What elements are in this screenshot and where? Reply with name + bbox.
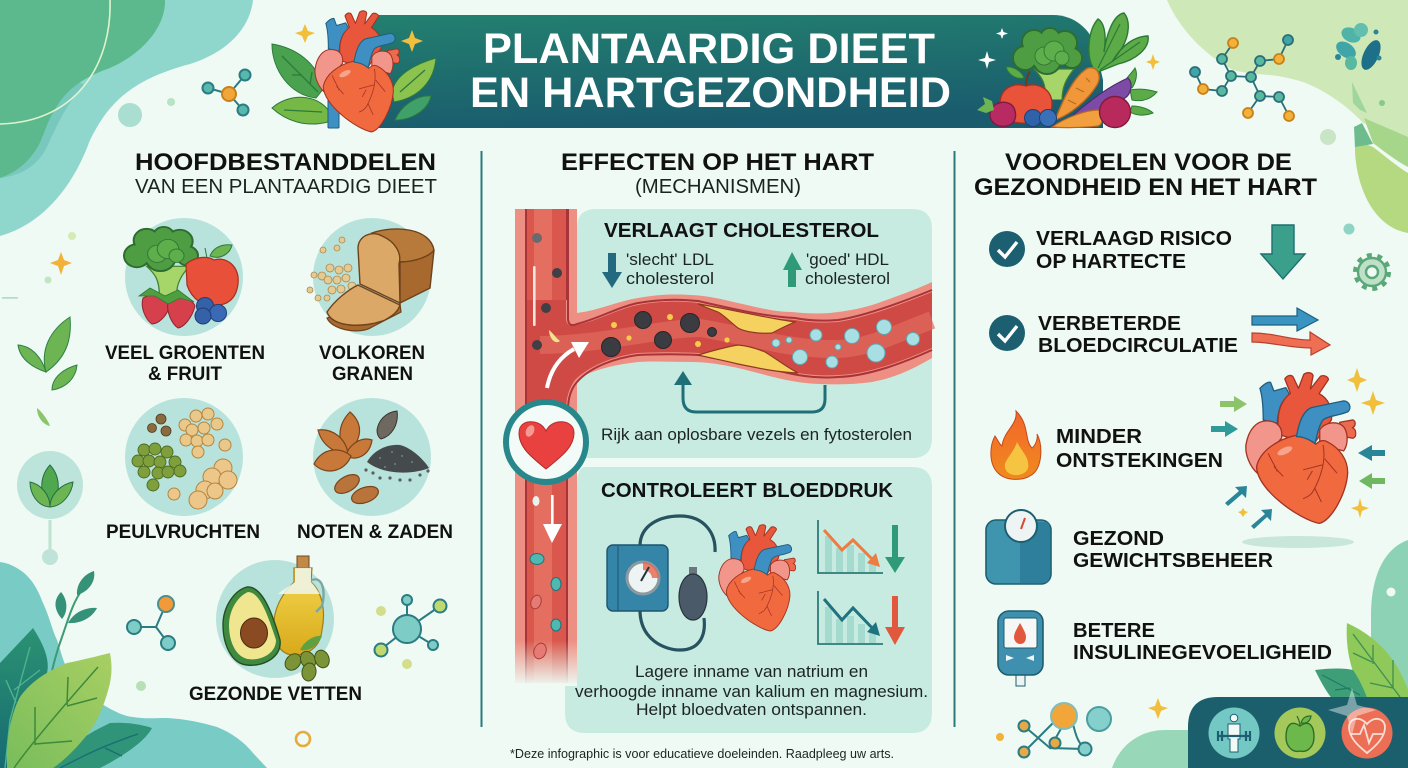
title: PLANTAARDIG DIEET — [483, 26, 935, 73]
benefit: healthy weight — [986, 510, 1274, 584]
sparkle bottom — [1148, 698, 1168, 719]
heading: components: HOOFDBESTANDDELEN — [135, 149, 436, 176]
icon: check — [989, 231, 1025, 267]
sprig — [50, 571, 97, 680]
plaque bottom — [698, 345, 798, 373]
title — [470, 26, 951, 117]
title: EN HARTGEZONDHEID — [470, 70, 951, 117]
label — [319, 343, 425, 385]
icon: scale — [986, 510, 1051, 584]
heading: blood pressure: CONTROLEERT BLOEDDRUK — [601, 480, 894, 502]
cholesterol heading and legend — [602, 220, 890, 288]
benefit: better circulation: VERBETERDE — [1038, 313, 1181, 335]
icon: heart in circle — [506, 402, 586, 482]
arrow: flow into branch — [547, 349, 574, 388]
label: GEZONDE VETTEN — [189, 684, 362, 705]
heading: benefits: VOORDELEN VOOR DE — [1005, 149, 1292, 176]
item: whole grains — [307, 218, 434, 385]
cholesterol heading and legend: 'goed' HDL — [806, 251, 889, 269]
text: sodium and potassium: verhoogde inname van kalium en magnesium. — [575, 683, 928, 701]
cholesterol heading and legend: cholesterol — [805, 270, 890, 288]
icon: heart rate — [1328, 688, 1392, 758]
icon: leaf medallion on left — [17, 451, 83, 565]
heading: components: VAN EEN PLANTAARDIG DIEET — [135, 176, 437, 198]
footnote: *Deze infographic is voor educatieve doeleinden. Raadpleeg uw arts. — [510, 747, 894, 761]
item: healthy fats — [189, 556, 362, 705]
heading: components — [135, 149, 437, 198]
text: sodium and potassium: Lagere inname van natrium en — [635, 663, 868, 681]
decorative blob: bottom left with leaves — [0, 562, 267, 768]
decorative dots — [136, 681, 310, 746]
label: VEEL GROENTEN — [105, 343, 265, 364]
icon: big heart with arrows — [1211, 368, 1385, 548]
item: vegetables and fruit — [105, 218, 265, 385]
title banner — [372, 15, 1103, 128]
arrow: bracket from fibres to artery — [674, 371, 825, 412]
icon: blood pressure monitor — [607, 516, 715, 650]
arrow: LDL down — [602, 253, 622, 288]
heading: benefits — [974, 149, 1317, 201]
benefit: lower risk of heart events: OP HARTECTE — [1036, 251, 1186, 273]
text: sodium and potassium: Helpt bloedvaten ontspannen. — [636, 701, 867, 719]
label: NOTEN & ZADEN — [297, 522, 453, 543]
panel: benefits — [974, 149, 1385, 686]
arrow: HDL up — [783, 252, 802, 287]
arrow: red flow — [1252, 332, 1330, 355]
benefit: healthy weight: GEZOND — [1073, 528, 1164, 550]
icon: heart in blood pressure panel — [719, 525, 796, 631]
benefit: healthy weight: GEWICHTSBEHEER — [1073, 550, 1274, 572]
label: GRANEN — [332, 364, 413, 385]
decorative blob: top right — [1167, 0, 1408, 234]
cholesterol heading and legend: VERLAAGT CHOLESTEROL — [604, 220, 879, 242]
item: legumes — [106, 398, 260, 543]
icon: apple — [1274, 708, 1326, 758]
cholesterol heading and legend: 'slecht' LDL — [626, 251, 714, 269]
text: fibres: Rijk aan oplosbare vezels en fytosterolen — [601, 426, 912, 444]
icon: heart with leaves in banner — [272, 11, 436, 132]
plaque top — [698, 304, 795, 333]
leaves bottom right — [1315, 623, 1408, 700]
gear icon — [1355, 255, 1389, 289]
molecule: bottom right — [996, 703, 1111, 758]
panel: controls blood pressure background — [565, 467, 932, 733]
heading: benefits: GEZONDHEID EN HET HART — [974, 174, 1317, 201]
panel: main components — [105, 149, 453, 746]
icon: vegetables and fruit in banner — [977, 13, 1160, 128]
benefit: better insulin sensitivity: INSULINEGEVOELIGHEID — [1073, 642, 1332, 664]
benefit: less inflammation: ONTSTEKINGEN — [1056, 450, 1223, 472]
arrow: down green — [885, 525, 905, 573]
benefit: better insulin sensitivity — [998, 611, 1332, 686]
arrow: blue flow — [1252, 308, 1318, 331]
icon: glucose meter — [998, 611, 1043, 686]
molecule: left of fats — [127, 596, 175, 650]
decorative blob: bottom centre-right and right — [1112, 540, 1408, 768]
molecule: top right — [1190, 35, 1294, 121]
heading: effects: EFFECTEN OP HET HART — [561, 149, 874, 176]
decorative blob: top left — [0, 0, 253, 236]
cholesterol heading and legend: cholesterol — [626, 270, 714, 288]
arrow: flow downward — [543, 495, 562, 543]
arrow: large down — [1261, 225, 1305, 279]
label: VOLKOREN — [319, 343, 425, 364]
molecule: top left — [202, 70, 250, 116]
text: sodium and potassium — [575, 663, 928, 719]
benefit: less inflammation: MINDER — [1056, 426, 1143, 448]
benefit: lower risk of heart events — [989, 225, 1305, 279]
label — [105, 343, 265, 385]
panel: effects on the heart — [506, 149, 932, 733]
icon: flame — [991, 411, 1041, 479]
molecule: right of fats — [374, 595, 446, 669]
benefit: less inflammation — [991, 411, 1223, 479]
icon: check — [989, 315, 1025, 351]
benefit: better circulation: BLOEDCIRCULATIE — [1038, 335, 1238, 357]
arrow: down red — [885, 596, 905, 645]
left side decorations — [2, 232, 77, 426]
benefit: better circulation — [989, 308, 1330, 357]
icon: fitness — [1208, 708, 1260, 758]
label: PEULVRUCHTEN — [106, 522, 260, 543]
footer panel with round icons — [1188, 688, 1408, 768]
heading: effects: (MECHANISMEN) — [635, 176, 801, 198]
benefit: lower risk of heart events: VERLAAGD RISICO — [1036, 228, 1232, 250]
heading: effects — [561, 149, 874, 198]
benefit: better insulin sensitivity: BETERE — [1073, 620, 1155, 642]
icon: teal plant emblem top right — [1333, 23, 1385, 73]
item: nuts and seeds — [297, 398, 453, 543]
label: & FRUIT — [148, 364, 222, 385]
dividers — [482, 151, 954, 727]
artery illustration — [515, 209, 932, 686]
panel: lowers cholesterol background — [577, 209, 932, 458]
chart: falling trend 1 — [818, 520, 905, 573]
chart: falling trend 2 — [818, 591, 905, 645]
